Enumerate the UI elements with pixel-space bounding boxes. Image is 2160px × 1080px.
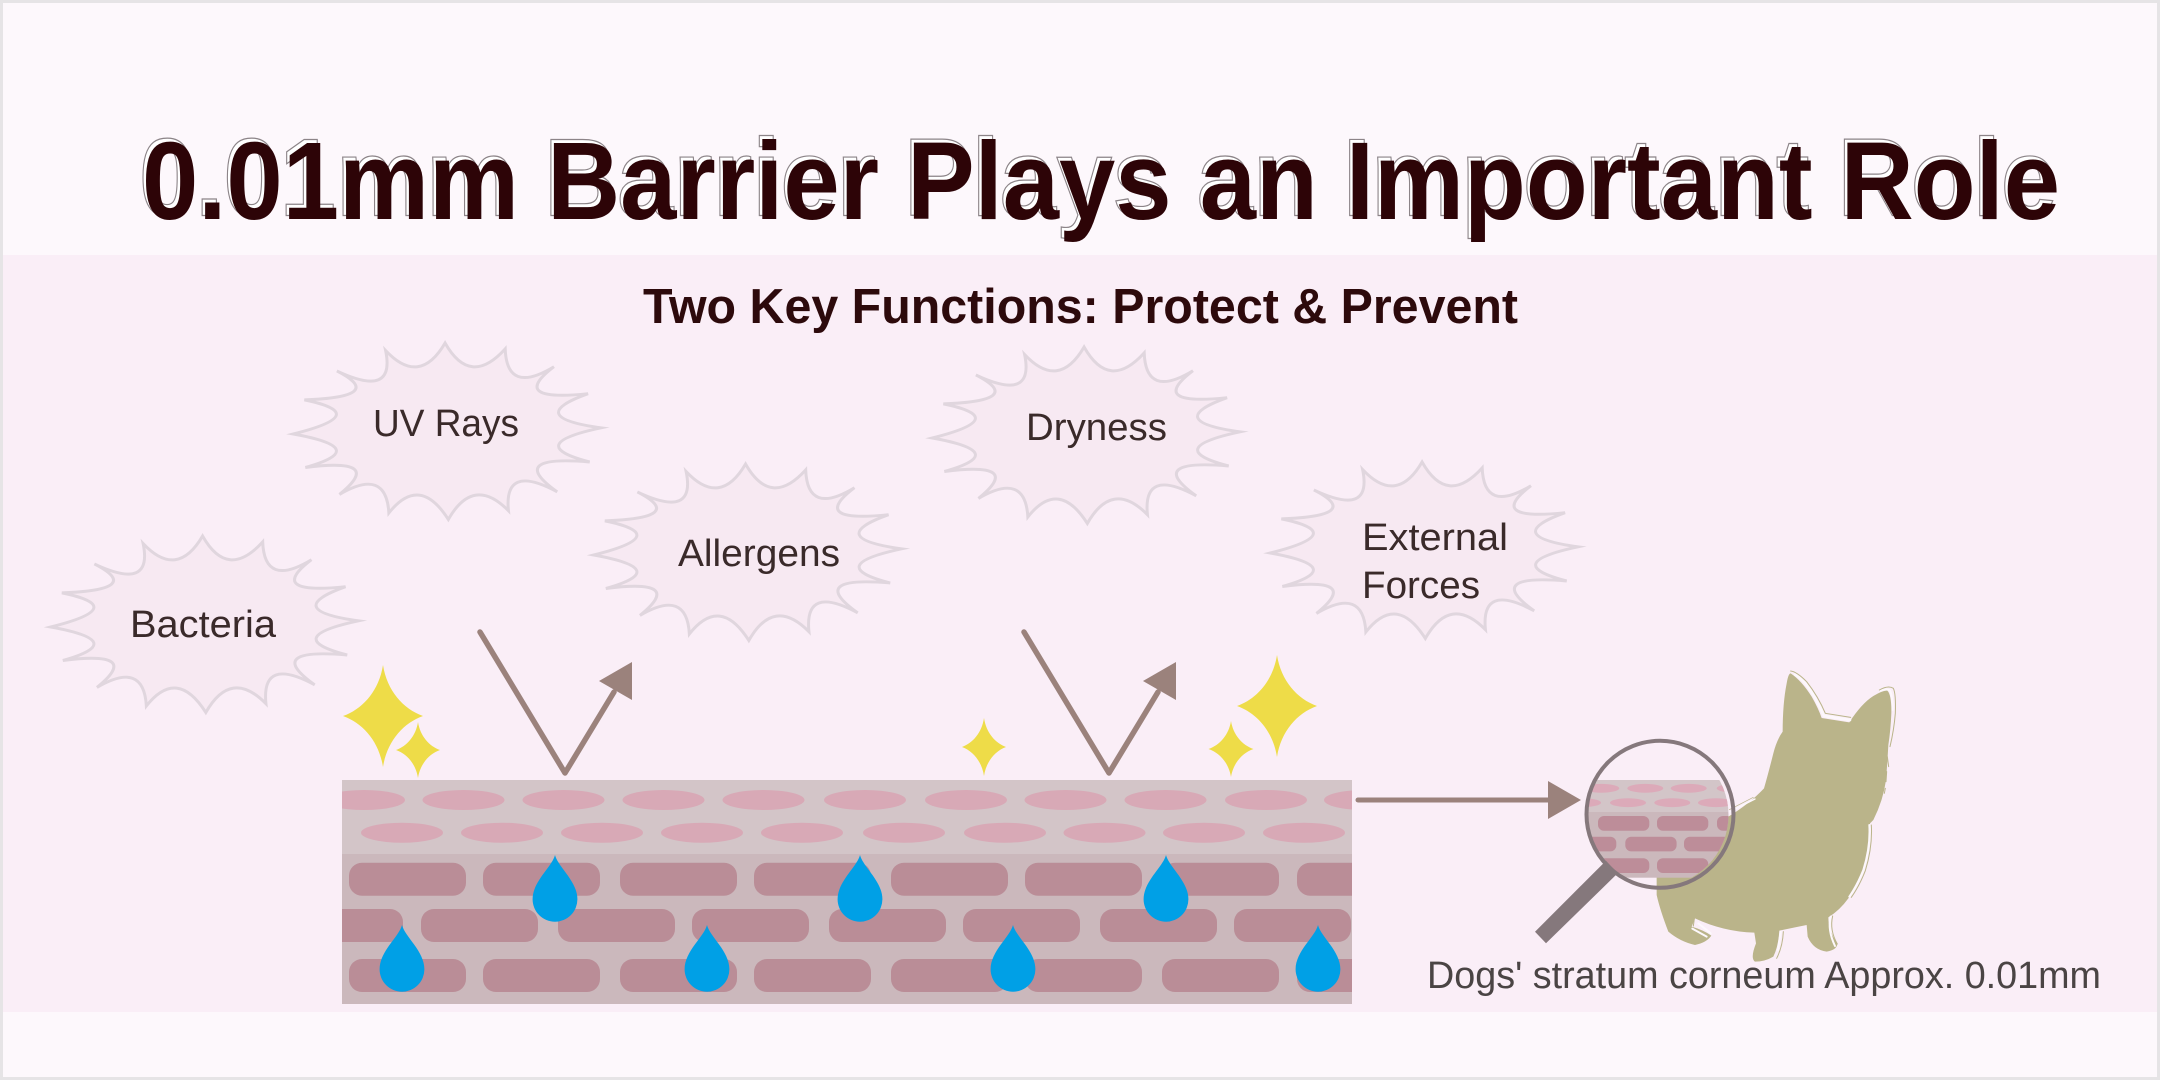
burst: UV Rays: UV Rays bbox=[373, 403, 519, 445]
water drops bbox=[380, 855, 1340, 992]
burst: Allergens bbox=[594, 464, 902, 640]
magnifier lens with enlarged skin bbox=[1588, 780, 1728, 878]
skin cross-section bbox=[342, 780, 1352, 1004]
burst: Bacteria: Bacteria bbox=[130, 604, 277, 646]
caption: Dogs' stratum corneum Approx. 0.01mm bbox=[1427, 955, 2101, 997]
sparkle: centre bbox=[962, 718, 1006, 776]
burst: Allergens: Allergens bbox=[678, 533, 840, 575]
burst: External Forces: External bbox=[1362, 517, 1508, 559]
burst: Dryness: Dryness bbox=[1026, 407, 1167, 449]
burst: UV Rays bbox=[293, 343, 601, 519]
sparkles: left bbox=[343, 665, 440, 778]
burst: Dryness bbox=[932, 347, 1240, 523]
subtitle: Two Key Functions: Protect & Prevent bbox=[643, 280, 1518, 334]
arrow: deflected left bbox=[480, 632, 632, 773]
burst: External Forces: Forces bbox=[1362, 565, 1480, 607]
burst: Bacteria bbox=[51, 536, 359, 712]
magnifier bbox=[1535, 738, 1736, 944]
sparkles: right bbox=[1208, 655, 1317, 777]
arrow: deflected right bbox=[1024, 632, 1176, 773]
arrow: skin to magnifier bbox=[1358, 781, 1581, 819]
burst: External Forces bbox=[1270, 462, 1578, 638]
dog silhouette bbox=[1657, 671, 1895, 962]
